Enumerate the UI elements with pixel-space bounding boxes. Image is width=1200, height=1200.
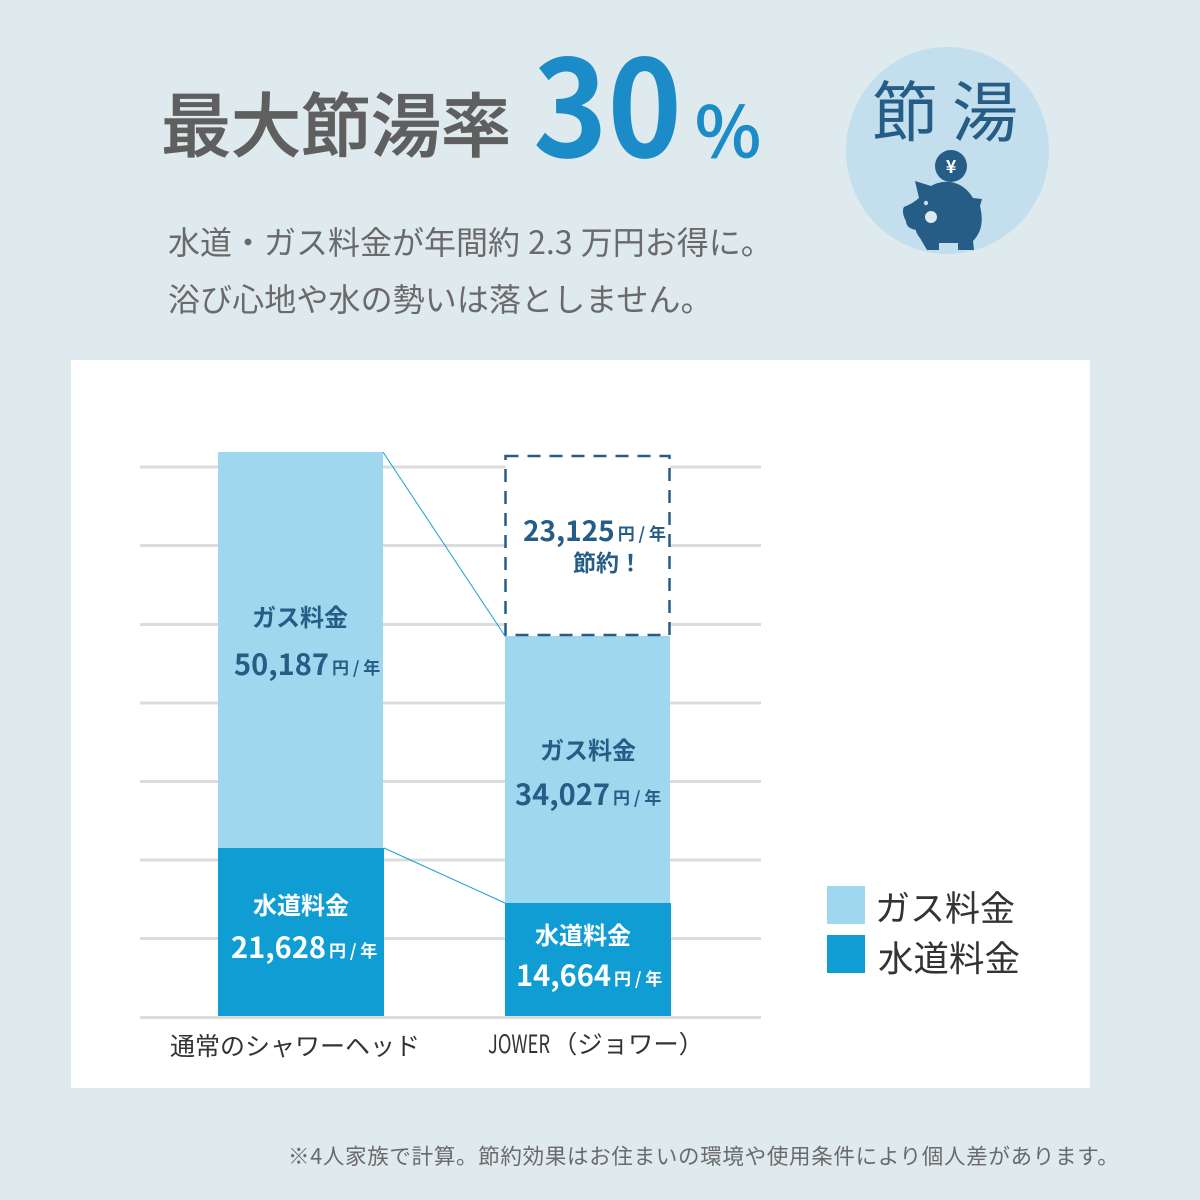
title: maximum hot water saving rate 30% [161,2,761,196]
legend [827,881,1020,982]
axis label: regular shower head: 通常のシャワーヘッド [170,1027,420,1063]
bar: JOWER [505,636,671,1016]
legend item: gas fee: ガス料金 [875,881,1015,932]
segment: water fee 14,664: 水道料金 [535,916,631,951]
segment: gas fee 34,027: ガス料金 [540,731,636,766]
badge heading: 節 湯 [872,60,1018,156]
segment: gas fee 34,027 [505,636,670,903]
footnote: ※4人家族で計算。節約効果はお住まいの環境や使用条件により個人差があります。 [288,1140,1119,1171]
segment: gas fee 34,027: 円 / 年 [613,784,661,809]
callout: savings dashed box [506,456,670,635]
segment: gas fee 50,187 [218,452,383,848]
segment: water fee 21,628: 21,628 [231,925,326,967]
callout: savings dashed box: 円 / 年 [618,520,666,545]
subtitle text: 水道・ガス料金が年間約 2.3 万円お得に。 [168,218,773,264]
icon: piggy bank [903,181,982,250]
segment: water fee 21,628: 水道料金 [253,886,349,921]
segment: water fee 14,664 [505,903,671,1016]
icon: yen coin [935,150,967,182]
segment: gas fee 50,187: 50,187 [234,642,329,684]
callout: savings dashed box: 節約！ [573,544,642,578]
segment: water fee 14,664: 14,664 [516,953,611,995]
title: maximum hot water saving rate 30%: % [695,77,761,178]
badge: hot water saving with piggy bank [846,47,1049,254]
panel: chart background [71,360,1090,1088]
legend item: water fee: 水道料金 [878,931,1020,982]
subtitle text [168,218,773,321]
title: maximum hot water saving rate 30%: 最大節湯率 [161,71,511,172]
title: maximum hot water saving rate 30%: 30 [533,2,682,196]
segment: gas fee 34,027: 34,027 [515,772,610,814]
subtitle text: 浴び心地や水の勢いは落としません。 [168,275,713,321]
axis label: JOWER: （ジョワー） [552,1025,704,1061]
connector: gas fee difference [383,452,505,636]
axis label: JOWER: JOWER [488,1025,550,1061]
segment: gas fee 50,187: 円 / 年 [332,654,380,679]
segment: gas fee 50,187: ガス料金 [252,598,348,633]
chart: grid lines [140,466,761,1019]
bar: regular shower head [218,452,384,1016]
connector: water fee difference [384,848,505,903]
icon: yen coin: ¥ [946,153,957,179]
segment: water fee 21,628: 円 / 年 [329,937,377,962]
segment: water fee 14,664: 円 / 年 [614,965,662,990]
axis label: JOWER [488,1025,704,1061]
segment: water fee 21,628 [218,848,384,1016]
callout: savings dashed box: 23,125 [523,510,615,550]
